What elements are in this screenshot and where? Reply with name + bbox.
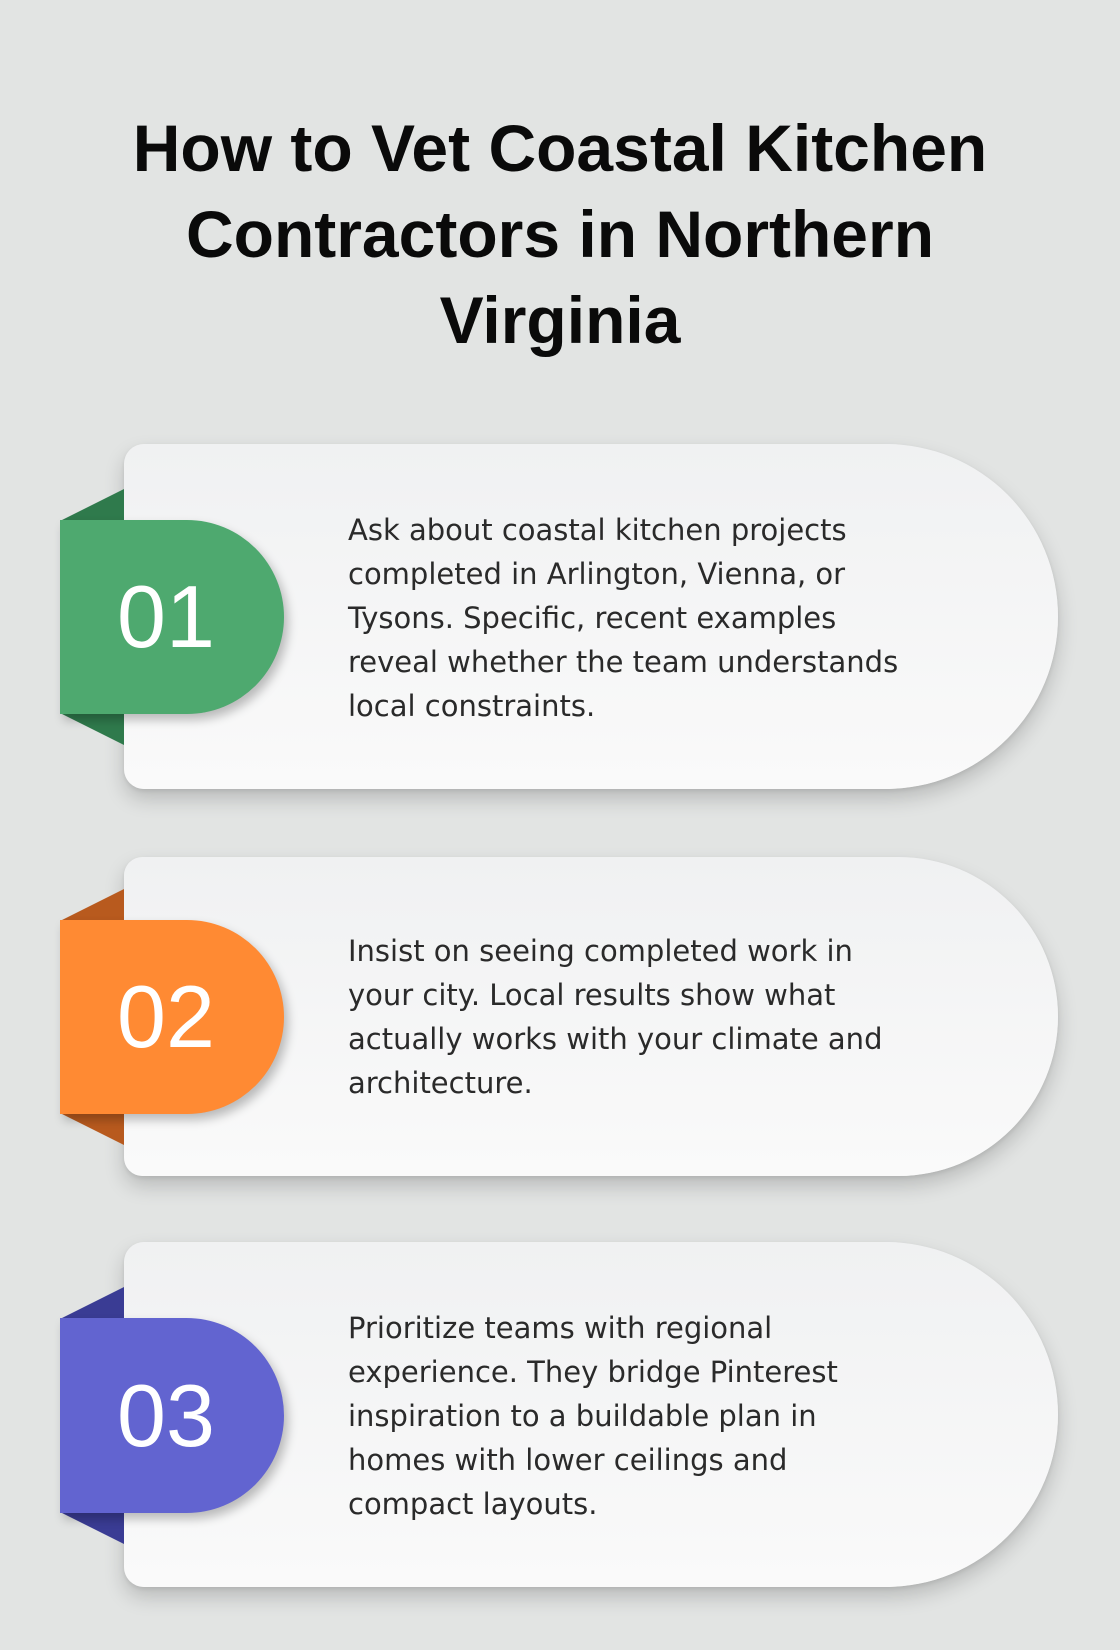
step 1 (58, 444, 1066, 808)
text 1: Ask about coastal kitchen projects completed in Arlington, Vienna, or Tysons. Specific, recent examples reveal whether the team understands local constraints. (348, 513, 898, 723)
text 3: Prioritize teams with regional experience. They bridge Pinterest inspiration to a buildable plan in homes with lower ceilings and compact layouts. (348, 1311, 838, 1521)
fold bottom 1 (62, 714, 124, 745)
fold top 2 (62, 889, 124, 920)
text 2: Insist on seeing completed work in your city. Local results show what actually works with your climate and architecture. (348, 934, 882, 1100)
fold top 1 (62, 489, 124, 520)
title: How to Vet Coastal Kitchen (133, 111, 987, 185)
step 2 (58, 856, 1066, 1194)
title: Contractors in Northern (186, 197, 934, 271)
card 3 (124, 1242, 1058, 1587)
title (133, 111, 987, 357)
fold bottom 3 (62, 1513, 124, 1544)
card 1 (124, 444, 1058, 789)
badge 03: 03 (117, 1366, 215, 1464)
badge 01 (60, 520, 284, 714)
fold bottom 2 (62, 1114, 124, 1145)
badge 02: 02 (117, 967, 215, 1066)
badge 01: 01 (117, 567, 215, 666)
badge 03 (60, 1318, 284, 1513)
card 2 (124, 857, 1058, 1176)
title: Virginia (440, 283, 680, 357)
fold top 3 (62, 1287, 124, 1318)
badge 02 (60, 920, 284, 1114)
